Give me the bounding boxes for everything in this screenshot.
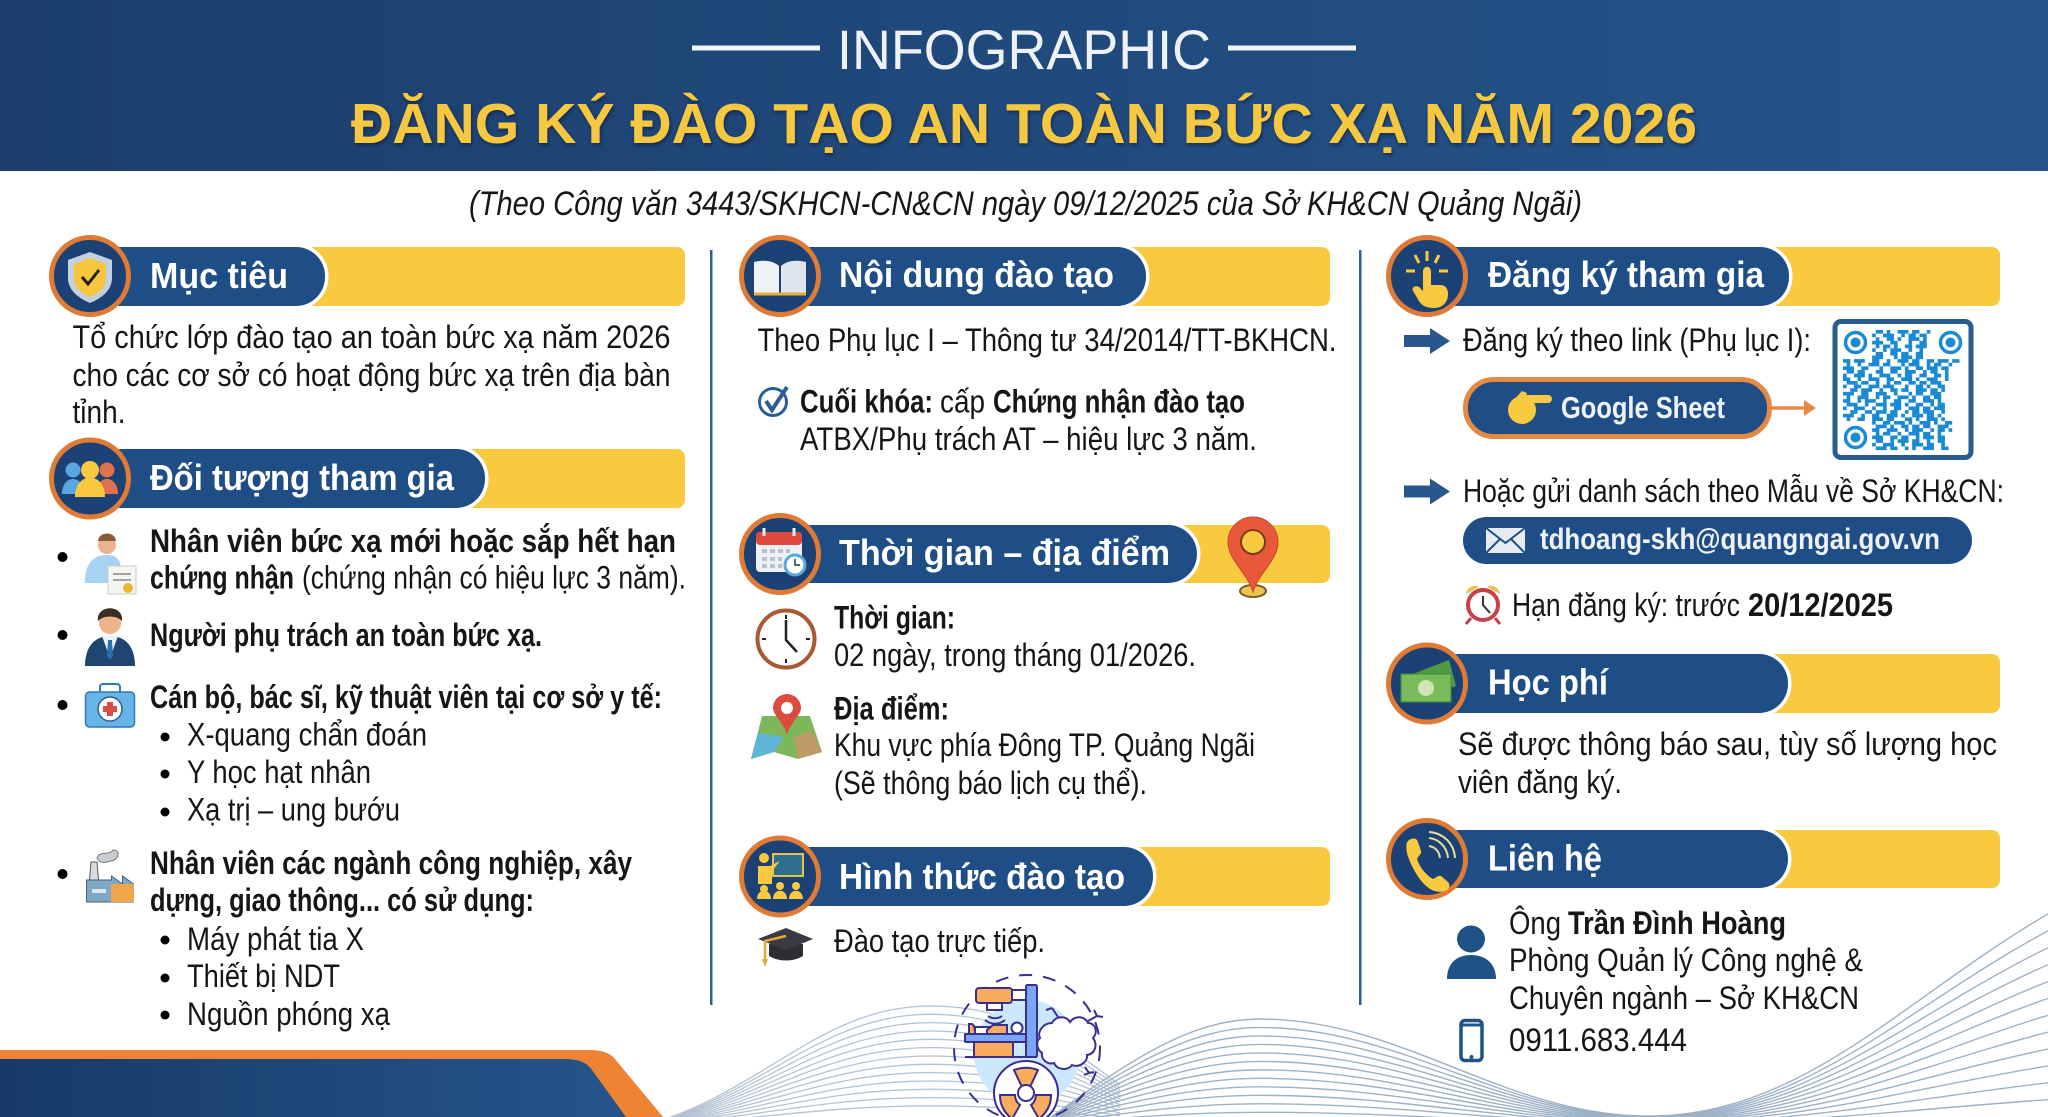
icon: worker with certificate xyxy=(85,534,136,594)
tuition text xyxy=(1458,726,1997,800)
section header: Nội dung đào tạo: Nội dung đào tạo xyxy=(839,254,1114,295)
icon: man in suit xyxy=(85,608,135,666)
icon: banknotes xyxy=(1401,660,1456,702)
icon: phone handset xyxy=(1406,832,1455,892)
location block xyxy=(751,690,1255,801)
panel: Học phí xyxy=(1388,645,2000,800)
icon: factory xyxy=(86,850,134,902)
icon: location pin xyxy=(1228,517,1278,597)
subtitle: (Theo Công văn 3443/SKHCN-CN&CN ngày 09/12/2025 của Sở KH&CN Quảng Ngãi) xyxy=(469,185,1582,223)
header label: INFOGRAPHIC xyxy=(692,18,1356,81)
target list item 3: Xạ trị – ung bướu xyxy=(187,792,400,828)
target list item 2 xyxy=(58,608,542,666)
tuition text: viên đăng ký. xyxy=(1458,764,1622,800)
target list item 1 xyxy=(58,523,686,596)
section header: Thời gian – địa điểm xyxy=(742,516,1330,597)
target list item 4: dựng, giao thông... có sử dụng: xyxy=(150,882,534,918)
icon: shield xyxy=(68,252,112,303)
contact person xyxy=(1447,905,1863,1016)
contact person: Chuyên ngành – Sở KH&CN xyxy=(1509,980,1859,1016)
end of course certificate note: cấp xyxy=(940,384,985,420)
icon: graduation cap xyxy=(758,928,813,967)
panel: Mục tiêu xyxy=(52,238,685,430)
section header: Nội dung đào tạo xyxy=(742,238,1330,314)
panel: Đối tượng tham gia xyxy=(52,440,686,1032)
target list item 4: Thiết bị NDT xyxy=(187,958,340,994)
QR code xyxy=(1835,322,1971,458)
target list item 1: chứng nhận xyxy=(150,560,294,596)
section header: Học phí xyxy=(1388,645,2000,722)
time block xyxy=(758,600,1196,673)
section header: Học phí: Học phí xyxy=(1488,662,1609,702)
objective text: cho các cơ sở có hoạt động bức xạ trên địa bàn xyxy=(72,357,670,393)
target list item 3 xyxy=(58,679,662,828)
target list item 3: Cán bộ, bác sĩ, kỹ thuật viên tại cơ sở y tế: xyxy=(150,679,662,715)
location block: (Sẽ thông báo lịch cụ thể). xyxy=(834,765,1147,801)
panel: Thời gian – địa điểm xyxy=(742,516,1330,801)
target list item 2: Người phụ trách an toàn bức xạ. xyxy=(150,617,542,653)
section header: Mục tiêu xyxy=(52,238,685,314)
contact person: Phòng Quản lý Công nghệ & xyxy=(1509,942,1863,978)
icon: map xyxy=(751,694,822,759)
panel: Liên hệ xyxy=(1388,820,2000,1060)
location block: Địa điểm: xyxy=(834,690,949,726)
icon: mobile phone xyxy=(1461,1020,1482,1060)
arrow xyxy=(1404,478,1450,504)
training format text: Đào tạo trực tiếp. xyxy=(834,923,1045,959)
training format text xyxy=(758,923,1045,967)
email pill xyxy=(1463,517,1972,564)
panel: Nội dung đào tạo xyxy=(742,238,1336,457)
footer band xyxy=(0,1050,663,1117)
icon: check xyxy=(760,387,787,416)
time block: 02 ngày, trong tháng 01/2026. xyxy=(834,637,1196,673)
section header: Đối tượng tham gia: Đối tượng tham gia xyxy=(150,457,455,498)
section header: Đối tượng tham gia xyxy=(52,440,685,517)
contact phone xyxy=(1461,1020,1687,1060)
time block: Thời gian: xyxy=(834,600,955,636)
target list item 1: (chứng nhận có hiệu lực 3 năm). xyxy=(302,560,686,596)
location block: Khu vực phía Đông TP. Quảng Ngãi xyxy=(834,727,1255,763)
target list item 4: Máy phát tia X xyxy=(187,921,364,957)
target list item 1: Nhân viên bức xạ mới hoặc sắp hết hạn xyxy=(150,523,676,559)
icon: envelope xyxy=(1486,528,1525,553)
contact person: Ông xyxy=(1509,905,1561,941)
column dividers xyxy=(710,250,1362,1005)
section header: Đăng ký tham gia: Đăng ký tham gia xyxy=(1488,254,1765,295)
deadline: Hạn đăng ký: trước xyxy=(1512,587,1740,623)
arrow xyxy=(1404,328,1450,354)
decorative waves xyxy=(645,914,2048,1117)
header label: INFOGRAPHIC: INFOGRAPHIC xyxy=(837,18,1211,81)
objective text: Tổ chức lớp đào tạo an toàn bức xạ năm 2026 xyxy=(72,319,670,355)
target list item 4: Nguồn phóng xạ xyxy=(187,996,390,1032)
section header: Thời gian – địa điểm: Thời gian – địa điểm xyxy=(839,532,1170,573)
objective text: tỉnh. xyxy=(72,394,126,430)
icon: pointing hand xyxy=(1508,391,1552,424)
register by link: Đăng ký theo link (Phụ lục I): xyxy=(1463,322,1811,358)
title: ĐĂNG KÝ ĐÀO TẠO AN TOÀN BỨC XẠ NĂM 2026 xyxy=(351,91,1697,156)
icon: clock xyxy=(758,610,814,668)
end of course certificate note xyxy=(760,384,1257,457)
target list item 3: Y học hạt nhân xyxy=(187,754,371,790)
email pill: tdhoang-skh@quangngai.gov.vn xyxy=(1540,523,1940,556)
arrow to QR xyxy=(1772,400,1816,416)
section header: Liên hệ xyxy=(1388,820,2000,898)
icon: medical kit xyxy=(86,684,134,727)
end of course certificate note: Chứng nhận đào tạo xyxy=(993,384,1245,420)
section header: Đăng ký tham gia xyxy=(1388,238,2000,314)
training content text: Theo Phụ lục I – Thông tư 34/2014/TT-BKHCN. xyxy=(758,322,1336,358)
contact person: Trần Đình Hoàng xyxy=(1568,905,1786,941)
section header: Hình thức đào tạo xyxy=(742,838,1330,915)
Google Sheet button xyxy=(1466,380,1770,436)
panel: Đăng ký tham gia xyxy=(1388,238,2004,624)
section header: Liên hệ: Liên hệ xyxy=(1488,838,1602,878)
icon: radiation machine illustration xyxy=(954,975,1103,1117)
contact phone: 0911.683.444 xyxy=(1509,1022,1687,1058)
icon: teacher xyxy=(757,853,803,899)
icon: open book xyxy=(754,261,806,294)
objective text xyxy=(72,319,670,430)
icon: tapping hand xyxy=(1406,251,1448,308)
end of course certificate note: Cuối khóa: xyxy=(800,384,933,420)
icon: alarm clock xyxy=(1466,586,1500,624)
section header: Hình thức đào tạo: Hình thức đào tạo xyxy=(839,856,1125,897)
icon: people xyxy=(62,461,118,497)
header band xyxy=(0,0,2048,171)
icon: person xyxy=(1447,926,1496,979)
Google Sheet button: Google Sheet xyxy=(1561,390,1725,425)
target list item 3: X-quang chẩn đoán xyxy=(187,716,427,752)
icon: calendar xyxy=(756,528,805,575)
deadline xyxy=(1466,586,1893,624)
tuition text: Sẽ được thông báo sau, tùy số lượng học xyxy=(1458,726,1997,762)
section header: Mục tiêu: Mục tiêu xyxy=(150,255,288,296)
target list item 4 xyxy=(58,845,632,1032)
deadline: 20/12/2025 xyxy=(1748,587,1893,623)
target list item 4: Nhân viên các ngành công nghiệp, xây xyxy=(150,845,632,881)
panel: Hình thức đào tạo xyxy=(742,838,1330,967)
end of course certificate note: ATBX/Phụ trách AT – hiệu lực 3 năm. xyxy=(800,421,1257,457)
